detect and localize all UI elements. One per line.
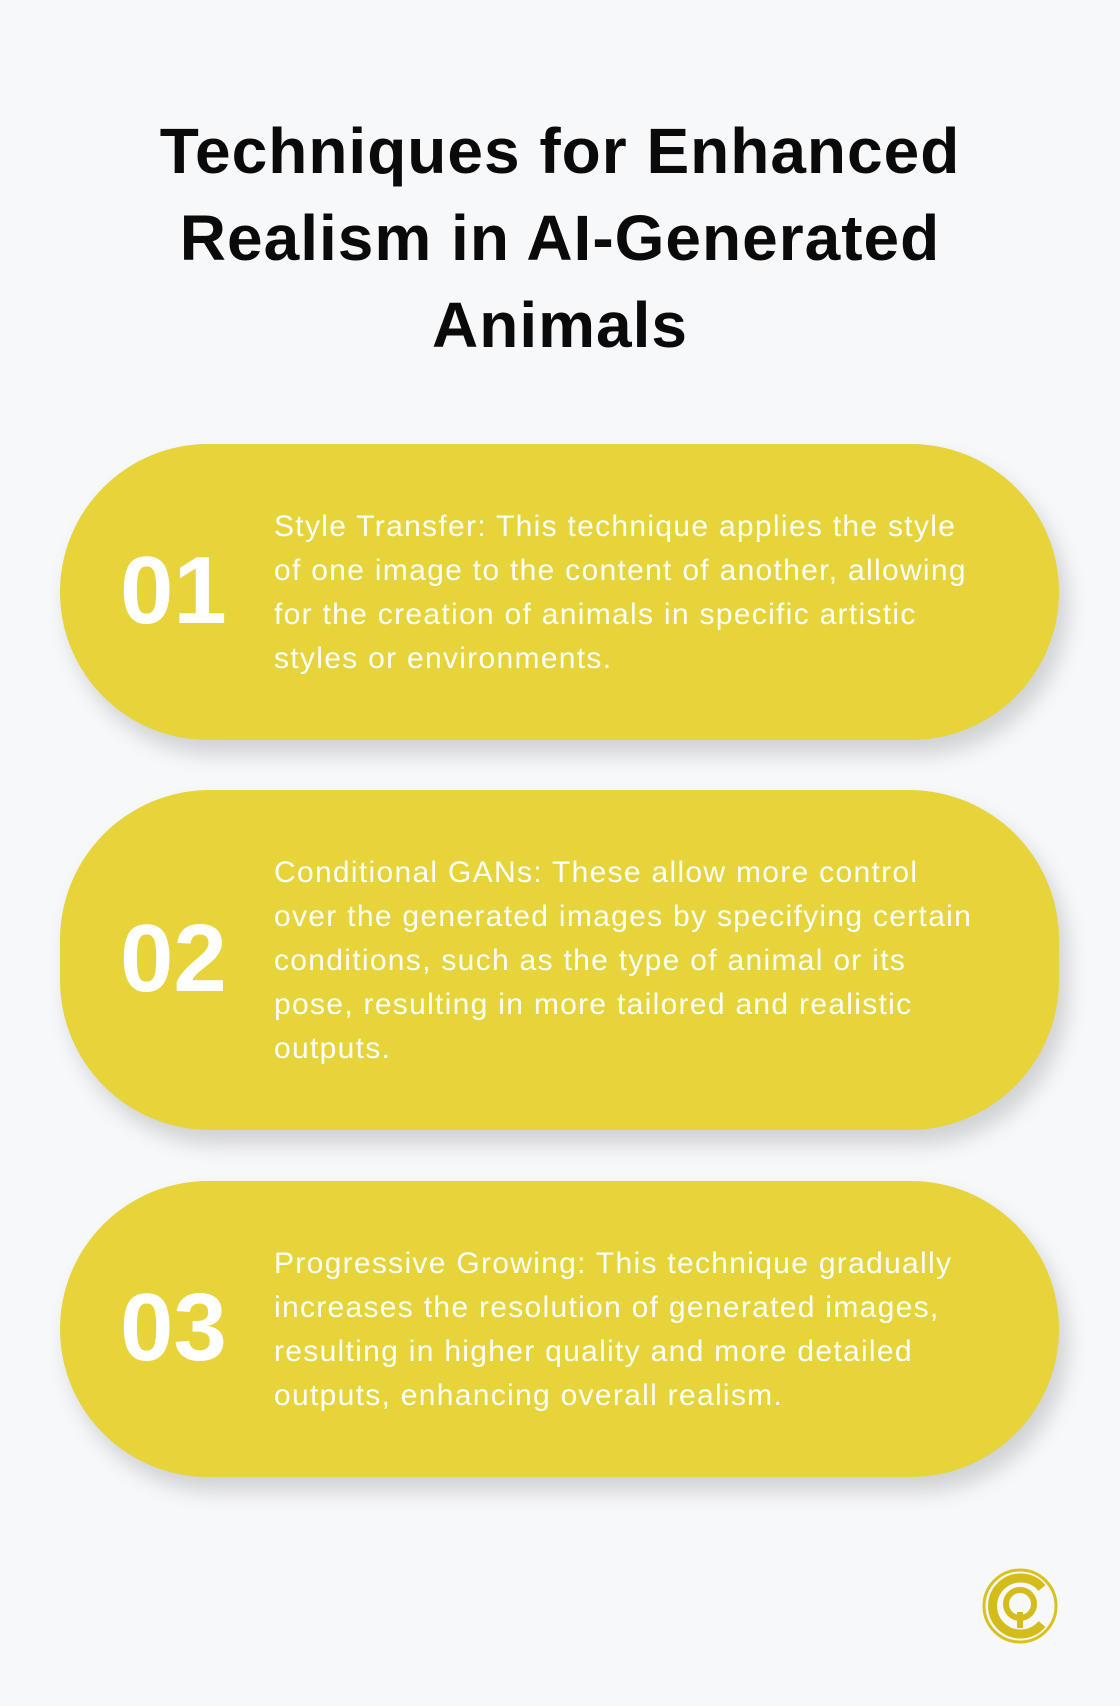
number 03: 03 (120, 1274, 227, 1381)
text 02: Conditional GANs: These allow more control (274, 856, 918, 889)
title: Techniques for Enhanced (160, 115, 960, 187)
panel: step 01 (60, 444, 1059, 740)
panel: step 03 (60, 1181, 1059, 1477)
text 02: outputs. (274, 1032, 391, 1065)
text 01: styles or environments. (274, 642, 612, 675)
text 01: for the creation of animals in specific artistic (274, 598, 917, 631)
title: Animals (432, 289, 688, 361)
text 03 (274, 1247, 952, 1412)
text 02 (274, 856, 972, 1065)
text 03: outputs, enhancing overall realism. (274, 1379, 783, 1412)
text 01: Style Transfer: This technique applies the style (274, 510, 956, 543)
panel: step 02 (60, 790, 1059, 1130)
title (160, 115, 960, 361)
text 03: Progressive Growing: This technique gradually (274, 1247, 952, 1280)
text 02: pose, resulting in more tailored and realistic (274, 988, 912, 1021)
text 03: increases the resolution of generated images, (274, 1291, 940, 1324)
text 01: of one image to the content of another, allowing (274, 554, 967, 587)
text 01 (274, 510, 967, 675)
text 02: over the generated images by specifying certain (274, 900, 972, 933)
number 01: 01 (120, 537, 227, 644)
number 02: 02 (120, 905, 227, 1012)
icon: logo (982, 1568, 1058, 1644)
title: Realism in AI-Generated (180, 202, 940, 274)
text 02: conditions, such as the type of animal or its (274, 944, 906, 977)
text 03: resulting in higher quality and more detailed (274, 1335, 913, 1368)
